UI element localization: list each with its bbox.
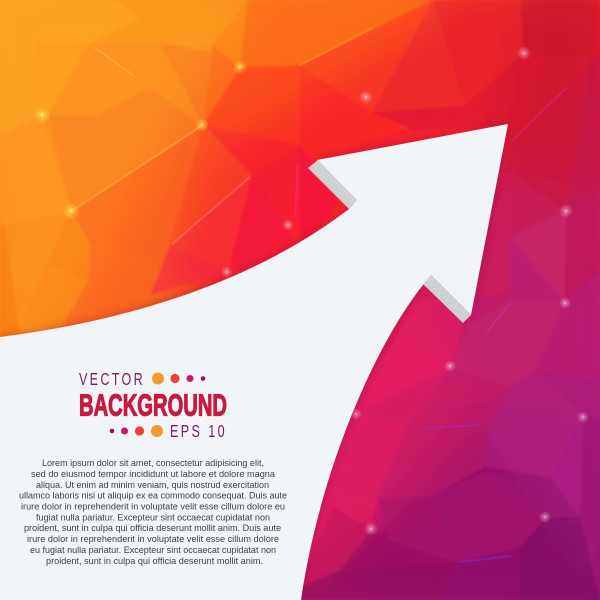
dots: bottom row — [110, 425, 163, 437]
body text: Lorem ipsum dolor sit amet, consectetur adipisicing elit, — [42, 457, 264, 468]
body text: proident, sunt in culpa qui officia deserunt mollit anim. — [46, 555, 263, 566]
body text: eu fugiat nulla pariatur. Excepteur sint occaecat cupidatat non — [30, 544, 276, 555]
body text: ullamco laboris nisi ut aliquip ex ea commodo consequat. Duis aute — [19, 490, 287, 500]
heading: background: BACKGROUND — [79, 388, 227, 422]
body text: irure dolor in reprehenderit in voluptate velit esse cillum dolore eu — [21, 500, 285, 512]
dots: top row — [152, 372, 205, 384]
body text: proident, sunt in culpa qui officia deserunt mollit anim. Duis aute — [24, 522, 281, 533]
heading: eps 10: EPS 10 — [170, 422, 225, 442]
body text: fugiat nulla pariatur. Excepteur sint occaecat cupidatat non — [36, 512, 270, 522]
arrow fold: upper — [308, 160, 357, 209]
body text: sed do eiusmod tempor incididunt ut labore et dolore magna — [31, 468, 276, 479]
white swoosh with arrow — [0, 124, 508, 600]
heading: vector: VECTOR — [79, 370, 143, 390]
body text: aliqua. Ut enim ad minim veniam, quis nostrud exercitation — [36, 479, 269, 490]
sparkles — [33, 46, 589, 536]
body text: irure dolor in reprehenderit in voluptate velit esse cillum dolore — [27, 533, 279, 544]
body text — [19, 457, 287, 566]
arrow fold: lower — [423, 275, 471, 323]
light streaks — [73, 28, 567, 562]
